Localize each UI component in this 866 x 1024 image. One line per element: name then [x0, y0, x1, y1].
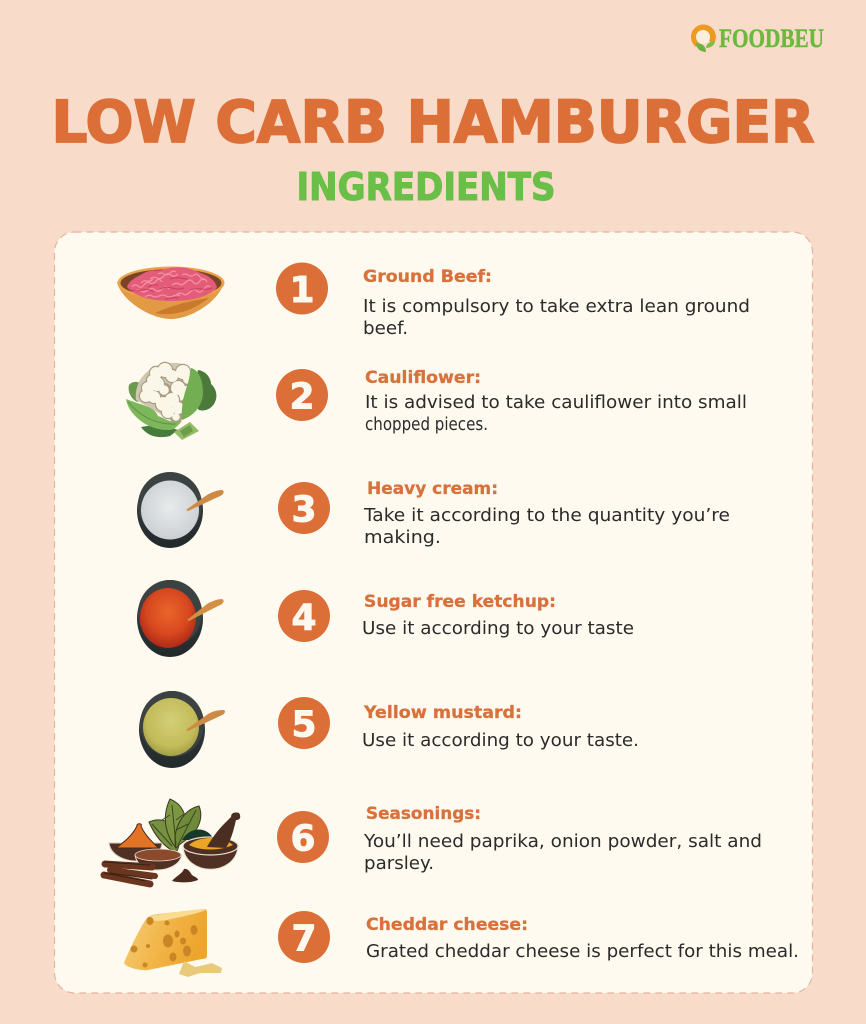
number badge 4: [278, 590, 330, 642]
number badge 6: 6: [290, 818, 316, 860]
number badge 5: 5: [291, 704, 317, 746]
item 5: yellow mustard: [278, 697, 639, 751]
icon: cauliflower: [126, 363, 216, 440]
item 2: cauliflower: [276, 368, 747, 435]
text: cheddar cheese: Cheddar cheese:: [366, 915, 528, 935]
icon: ketchup pot: [137, 580, 224, 657]
text: yellow mustard: [362, 703, 639, 751]
text: ground beef: beef.: [363, 319, 408, 339]
text: yellow mustard: Yellow mustard:: [363, 703, 522, 723]
number badge 2: [276, 369, 328, 421]
text: heavy cream: [363, 479, 730, 548]
logo: Foodbeu: FOODBEU: [719, 24, 824, 53]
logo: Foodbeu: [691, 24, 824, 53]
item 6: seasonings: [277, 804, 762, 874]
text: seasonings: parsley.: [364, 854, 434, 874]
text: sugar free ketchup: Use it according to your taste: [362, 619, 634, 639]
icon: cheddar cheese: [124, 909, 222, 977]
text: ground beef: [363, 267, 750, 339]
number badge 2: 2: [289, 376, 315, 418]
text: ground beef: Ground Beef:: [363, 267, 492, 287]
text: cheddar cheese: [366, 915, 799, 962]
text: seasonings: You’ll need paprika, onion powder, salt and: [363, 832, 762, 852]
text: cauliflower: Cauliflower:: [365, 368, 481, 388]
text: cauliflower: It is advised to take cauliflower into small: [365, 393, 747, 413]
text: cauliflower: chopped pieces.: [365, 415, 488, 435]
number badge 3: [278, 482, 330, 534]
text: yellow mustard: Use it according to your taste.: [362, 731, 639, 751]
number badge 1: 1: [289, 270, 315, 311]
text: cheddar cheese: Grated cheddar cheese is perfect for this meal.: [366, 942, 799, 962]
title: LOW CARB HAMBURGER: [52, 88, 814, 156]
text: seasonings: [363, 804, 762, 874]
subtitle: INGREDIENTS: [296, 165, 556, 209]
text: sugar free ketchup: [362, 592, 634, 639]
item 1: ground beef: [276, 262, 750, 339]
text: heavy cream: Heavy cream:: [367, 479, 498, 499]
number badge 1: [276, 262, 328, 314]
number badge 3: 3: [291, 490, 317, 530]
text: heavy cream: Take it according to the quantity you’re: [363, 506, 730, 526]
number badge 7: [278, 911, 330, 963]
number badge 5: [278, 697, 330, 749]
text: sugar free ketchup: Sugar free ketchup:: [364, 592, 556, 612]
text: cauliflower: [365, 368, 747, 435]
text: seasonings: Seasonings:: [366, 804, 481, 824]
panel: ingredients list: [54, 232, 812, 993]
item 3: heavy cream: [278, 479, 730, 548]
text: ground beef: It is compulsory to take extra lean ground: [363, 297, 750, 317]
number badge 7: 7: [291, 918, 317, 960]
icon: heavy cream pot: [137, 472, 224, 548]
number badge 4: 4: [291, 598, 317, 638]
icon: yellow mustard pot: [139, 691, 225, 768]
item 7: cheddar cheese: [278, 911, 799, 963]
number badge 6: [277, 811, 329, 863]
text: heavy cream: making.: [364, 528, 441, 548]
item 4: sugar free ketchup: [278, 590, 634, 642]
icon: ground beef bowl: [117, 266, 224, 319]
icon: seasonings: [104, 799, 240, 884]
